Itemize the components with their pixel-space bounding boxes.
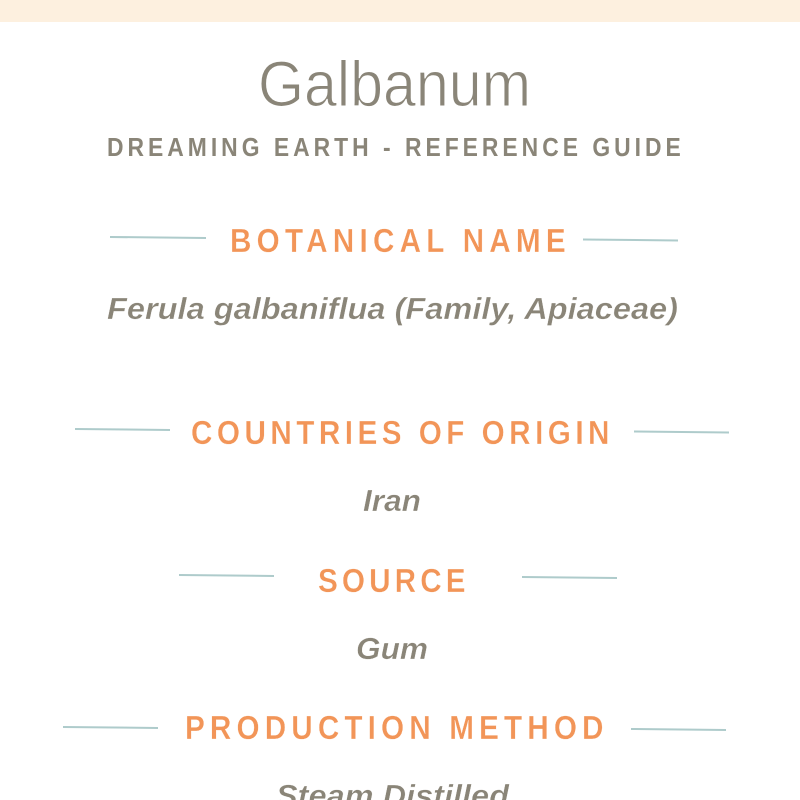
- title: Galbanum: [258, 48, 531, 120]
- line right: [631, 729, 726, 730]
- line left: [63, 727, 158, 728]
- section: countries of origin: [75, 415, 729, 518]
- value: Gum: [356, 631, 428, 666]
- line right: [522, 577, 617, 578]
- line right: [634, 432, 729, 433]
- subtitle: DREAMING EARTH - REFERENCE GUIDE: [107, 134, 681, 162]
- top cream band: [0, 0, 800, 22]
- heading: COUNTRIES OF ORIGIN: [191, 415, 610, 451]
- section: botanical name: [107, 223, 678, 326]
- line right: [583, 240, 678, 241]
- section: production method: [63, 710, 726, 800]
- heading: BOTANICAL NAME: [230, 223, 566, 259]
- section: source: [179, 563, 617, 666]
- heading: PRODUCTION METHOD: [185, 710, 604, 746]
- line left: [75, 429, 170, 430]
- line left: [179, 575, 274, 576]
- value: Iran: [363, 483, 421, 518]
- heading: SOURCE: [318, 563, 466, 599]
- line left: [110, 237, 206, 238]
- value: Ferula galbaniflua (Family, Apiaceae): [107, 291, 678, 326]
